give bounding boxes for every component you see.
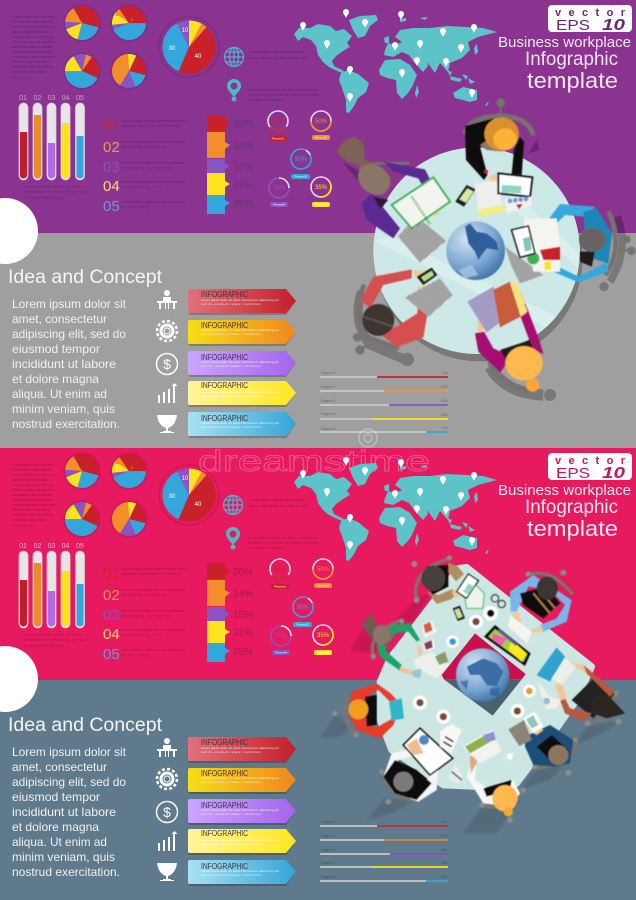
lower panel: big pie values: 40 [195, 502, 202, 508]
scene figures softened to match the source [332, 555, 625, 823]
lower panel: percentages: 20% [233, 567, 253, 578]
progress bar labels lower [321, 820, 448, 879]
text block: upper left intro: sed do eiusmod tempor inc [12, 24, 55, 29]
person: green top [362, 613, 423, 675]
lower panel: donut labels: 90% [297, 605, 310, 611]
lower panel: tube labels: 05 [76, 543, 84, 550]
progress bar labels upper: 70% [441, 371, 448, 375]
donut labels: Percent4 [273, 202, 285, 206]
lower panel: intro text: magna aliqua ut enim ad [12, 482, 53, 487]
lower panel: globe and pin captions: Lorem ipsum dolor sit amet consec [250, 497, 304, 502]
lower panel: list descriptions: adipiscing elit sed do eiusmod [121, 571, 181, 576]
lower panel: heading: Idea and Concept [8, 715, 163, 736]
donut labels: 35% [315, 185, 328, 191]
progress bar labels upper: 67% [441, 385, 448, 389]
tube labels: 03 [48, 95, 55, 102]
arrow banner text: INFOGRAPHIC [201, 321, 248, 330]
lower panel: numbered list: 04 [103, 626, 120, 643]
test tube bars [19, 103, 84, 180]
stacked bar percentages: 15% [233, 162, 253, 173]
lower panel: arrow banner text: Lorem ipsum dolor sit amet consectetur adipiscing elit [201, 869, 279, 873]
lower panel: arrow banner text [201, 738, 279, 877]
pie charts: four small pies [70, 11, 141, 83]
stacked bar percentages: 20% [233, 119, 253, 130]
tube labels [19, 95, 84, 102]
lower panel: pie rings [64, 452, 148, 538]
numbered list: 04 [103, 178, 120, 195]
text block: upper left intro: exercitation ullamco laboris [12, 44, 52, 49]
person left: purple top, brown hair [337, 137, 440, 245]
arrow banner text: Lorem ipsum dolor sit amet consectetur adipiscing elit [201, 390, 279, 394]
lower panel: arrow banner text: Lorem ipsum dolor sit amet consectetur adipiscing elit [201, 746, 279, 750]
tube labels: 02 [34, 95, 41, 102]
progress bar labels lower: 45% [441, 848, 448, 852]
person bottom-left: red jacket [361, 269, 430, 347]
lower panel: lorem text: eiusmod tempor [12, 790, 100, 804]
lower panel: percentages [233, 567, 253, 658]
progress bar labels lower: 70% [441, 820, 448, 824]
text block: lorem: minim veniam, quis [12, 402, 115, 416]
globe and pin captions [248, 49, 321, 102]
watermark: dreamstime [198, 445, 430, 478]
text block: upper left intro: voluptate velit esse cillum [12, 64, 54, 69]
lower panel: donut labels: Percent5 [317, 650, 329, 654]
progress bar labels lower: 58% [441, 861, 448, 865]
lower panel: tube caption [24, 632, 87, 648]
pie rings upper [64, 4, 148, 90]
lower panel: list descriptions: Lorem ipsum dolor sit amet consectetur [121, 566, 187, 571]
text block: lorem: nostrud exercitation. [12, 417, 120, 431]
arrow banner text: sed do eiusmod tempor incididunt [201, 364, 261, 368]
white corner circle upper [0, 198, 38, 264]
lower panel: intro text: nisi ut aliquip ex ea commodo [12, 497, 54, 502]
text block: upper left intro: pariatur [12, 75, 33, 80]
person: red-brown top with dark hair [555, 662, 625, 722]
lower panel: arrow banner text: sed do eiusmod tempor incididunt [201, 780, 261, 784]
numbered list descriptions: Lorem ipsum dolor sit amet consectetur [121, 118, 187, 123]
lower panel: arrow banner text: Lorem ipsum dolor sit amet consectetur adipiscing elit [201, 838, 279, 842]
numbered list descriptions: adipiscing elit sed do eiusmod [121, 123, 181, 128]
lower panel: numbered list [103, 565, 120, 663]
lower panel: intro text: consectetur adipiscing elit [12, 467, 53, 472]
long shadows [320, 593, 620, 833]
person: navy jacket [525, 723, 573, 767]
person: red shirt [348, 683, 400, 738]
donut labels: 50% [315, 119, 328, 125]
arrow banner text: Lorem ipsum dolor sit amet consectetur adipiscing elit [201, 360, 279, 364]
lower panel: donut labels: 50% [317, 567, 330, 573]
lower panel: arrow banner text: INFOGRAPHIC [201, 769, 248, 778]
lower panel: numbered list: 05 [103, 646, 120, 663]
lower panel: percentages: 25% [233, 647, 253, 658]
table and chair shadows [342, 140, 622, 401]
numbered list descriptions: adipiscing elit [121, 184, 162, 189]
badge: vector EPS 10: 10 [602, 17, 625, 34]
lower panel: arrow banner text: INFOGRAPHIC [201, 829, 248, 838]
lower panel: list descriptions: adipiscing [121, 652, 149, 657]
lower panel: tube labels: 04 [62, 543, 69, 550]
globe and pin captions: Lorem ipsum dolor sit amet consec [250, 49, 304, 54]
lower panel: globe and pin captions: Lorem ipsum dolor sit amet consectetur [248, 535, 319, 540]
lower panel: lorem text: nostrud exercitation. [12, 865, 120, 879]
person: blue shirt [510, 575, 572, 633]
arrow banner text: Lorem ipsum dolor sit amet consectetur adipiscing elit [201, 298, 279, 302]
lower panel: lorem text: et dolore magna [12, 820, 99, 834]
arrow banner text: sed do eiusmod tempor incididunt [201, 425, 261, 429]
lower panel: list descriptions: Lorem ipsum dolor sit amet consectetur [121, 608, 187, 613]
lower panel: title: template [527, 516, 618, 541]
lower panel: numbered list: 03 [103, 607, 120, 624]
lower panel: big pie values [169, 476, 202, 508]
lower panel: intro text: sed do eiusmod tempor inc [12, 472, 55, 477]
lower panel: numbered list: 01 [103, 565, 120, 582]
icons column [156, 290, 178, 433]
documents on table [392, 173, 560, 333]
lower panel: pies [70, 459, 141, 531]
chair casters [332, 555, 621, 823]
tube labels: 05 [76, 95, 84, 102]
progress bar labels upper: Degree 3 [321, 399, 335, 403]
numbered list descriptions: Lorem ipsum dolor sit amet consectetur [121, 139, 187, 144]
big pie chart [159, 17, 219, 77]
lower panel: list descriptions: adipiscing elit [121, 632, 162, 637]
lower panel: big pie [159, 465, 219, 525]
lower panel: big pie values: 10 [182, 476, 189, 482]
text block: upper left intro: consectetur adipiscing elit [12, 19, 53, 24]
chairs [359, 104, 632, 390]
lower panel: arrow banner text: INFOGRAPHIC [201, 862, 248, 871]
text block: lorem [12, 297, 127, 431]
background: slate band [0, 680, 636, 900]
lower panel: lorem text: amet, consectetur [12, 760, 107, 774]
stacked bar percentages: 25% [233, 199, 253, 210]
numbered list descriptions: Lorem ipsum dolor sit amet consectetur [121, 179, 187, 184]
lower panel: intro text: consequat duis aute irure [12, 502, 56, 507]
lower panel: list descriptions: Lorem ipsum dolor sit amet consectetur [121, 587, 187, 592]
donut labels: 90% [295, 157, 308, 163]
lower panel: badge: 10 [602, 465, 625, 482]
lower panel: arrow banners [188, 737, 296, 886]
globe [456, 648, 509, 702]
stacked bar percentages [233, 119, 253, 210]
lower panel: donut labels: 20% [274, 567, 287, 573]
badge: vector EPS 10 [548, 5, 632, 34]
stacked bar percentages: 14% [233, 141, 253, 152]
lower panel: dollar sign: $ [163, 804, 171, 820]
progress bar labels lower: Degree 4 [321, 861, 335, 865]
lower panel: arrow banner text: sed do eiusmod tempor incididunt [201, 750, 261, 754]
tube caption: consectetur adipiscing elit sed [24, 189, 87, 194]
lower panel: badge: EPS [556, 465, 590, 482]
lower panel: globe and pin captions: incididunt ut labore [248, 545, 285, 550]
lower panel: tube labels: 01 [19, 543, 27, 550]
globe and pin captions: incididunt ut labore [248, 97, 285, 102]
globe and pin captions: Lorem ipsum dolor sit amet consectetur [248, 87, 319, 92]
lower panel: lorem text: aliqua. Ut enim ad [12, 835, 107, 849]
lower panel: pin icon [226, 527, 240, 550]
lower panel: intro text: voluptate velit esse cillum [12, 512, 54, 517]
lower panel: arrow banner text: Lorem ipsum dolor sit amet consectetur adipiscing elit [201, 776, 279, 780]
person: white shirt with gray hair [383, 748, 438, 802]
lower panel: intro text: minim veniam quis nostrud [12, 487, 54, 492]
lower panel: donut labels [274, 567, 330, 654]
text block: lorem: eiusmod tempor [12, 342, 100, 356]
numbered list: 01 [103, 117, 120, 134]
lower panel: tube labels [19, 543, 84, 550]
lower panel: intro text: dolor in reprehenderit in [12, 507, 50, 512]
donut labels: Percent5 [315, 202, 327, 206]
lower panel: donut labels: Percent2 [317, 584, 329, 588]
big pie values: 30 [169, 46, 176, 52]
lower panel: arrow banner text: Lorem ipsum dolor sit amet consectetur adipiscing elit [201, 808, 279, 812]
text block: upper left intro [12, 14, 56, 80]
numbered list descriptions: adipiscing [121, 204, 149, 209]
numbered list descriptions [121, 118, 187, 209]
text block: upper left intro: nisi ut aliquip ex ea commodo [12, 49, 54, 54]
title: Business workplace [498, 34, 631, 51]
progress bar labels lower: Degree 1 [321, 820, 335, 824]
text block: upper left intro: magna aliqua ut enim ad [12, 34, 53, 39]
lower panel: globe and pin captions: tetur adipiscing elit sed do eius [250, 503, 308, 508]
arrow banner text: Lorem ipsum dolor sit amet consectetur adipiscing elit [201, 328, 279, 332]
arrow banner text: sed do eiusmod tempor incididunt [201, 394, 261, 398]
globe and pin captions: adipiscing elit sed do eiusmod tempor [248, 92, 321, 97]
donut labels: 20% [272, 119, 285, 125]
progress bars upper [320, 377, 448, 432]
globe [446, 221, 505, 280]
lower panel: globe icon [224, 496, 242, 514]
big pie values [169, 28, 202, 60]
lower panel: intro text: exercitation ullamco laboris [12, 492, 52, 497]
watermark [198, 429, 430, 478]
big pie values: 40 [195, 54, 202, 60]
lower panel: intro text: Lorem ipsum dolor sit amet [12, 462, 55, 467]
badge: vector EPS 10: EPS [556, 17, 590, 34]
numbered list: 03 [103, 159, 120, 176]
progress bar labels lower: Degree 5 [321, 875, 335, 879]
progress bar labels upper: Degree 5 [321, 427, 335, 431]
stacked bar percentages: 31% [233, 180, 253, 191]
scene figures softened to match the source [337, 98, 636, 392]
arrow banner text: sed do eiusmod tempor incididunt [201, 332, 261, 336]
lower panel: intro text: ididunt ut labore et dolore [12, 477, 51, 482]
lower panel: percentages: 15% [233, 610, 253, 621]
arrow banner text: INFOGRAPHIC [201, 290, 248, 299]
lower panel: list descriptions: Lorem ipsum dolor sit amet consectetur [121, 627, 187, 632]
lower panel: donut labels: 35% [317, 633, 330, 639]
lower panel: stacked bars [207, 563, 230, 662]
arrow banners [188, 289, 296, 438]
white corner circle lower [0, 646, 38, 712]
lower panel: arrow banner text: sed do eiusmod tempor incididunt [201, 873, 261, 877]
background: purple band [0, 0, 636, 233]
text block: upper left intro: minim veniam quis nostrud [12, 39, 54, 44]
tube labels: 01 [19, 95, 27, 102]
lower panel: big pie values: 30 [169, 494, 176, 500]
lower panel: globe and pin captions: adipiscing elit sed do eiusmod tempor [248, 540, 321, 545]
text block: lorem: incididunt ut labore [12, 357, 116, 371]
background: gray band [0, 233, 636, 448]
donut labels [272, 119, 328, 206]
lower panel: arrow banner text: sed do eiusmod tempor incididunt [201, 812, 261, 816]
progress bar labels upper: Degree 2 [321, 385, 335, 389]
lower panel: arrow banner text: INFOGRAPHIC [201, 738, 248, 747]
chairs [345, 558, 617, 807]
lower panel: percentages: 14% [233, 589, 253, 600]
chair casters [353, 98, 636, 355]
arrow banner text: Lorem ipsum dolor sit amet consectetur adipiscing elit [201, 421, 279, 425]
person top: black suit, orange hair [465, 117, 524, 186]
text block: lorem: adipiscing elit, sed do [12, 327, 126, 341]
world map [294, 9, 497, 113]
text block: upper left intro: dolor in reprehenderit in [12, 59, 50, 64]
lower panel: intro text: pariatur [12, 523, 33, 528]
lower panel: title: Infographic [525, 497, 618, 518]
diamond table [380, 567, 592, 787]
lower panel: donut labels: Percent3 [296, 622, 309, 626]
numbered list descriptions: Lorem ipsum dolor sit amet consectetur [121, 160, 187, 165]
lower panel: globe and pin captions [248, 497, 321, 550]
numbered list descriptions: adipiscing elit sed do [121, 144, 167, 149]
text block: upper left intro: Lorem ipsum dolor sit amet [12, 14, 55, 19]
lower panel: arrow banner text: sed do eiusmod tempor incididunt [201, 842, 261, 846]
lower panel: lorem text [12, 745, 127, 879]
lower panel: arrow banner text: INFOGRAPHIC [201, 801, 248, 810]
person right: blue shirt [538, 204, 612, 282]
title: Infographic [525, 49, 618, 70]
lower panel: list descriptions [121, 566, 187, 657]
lower panel: list descriptions: adipiscing elit sed do [121, 592, 167, 597]
table items [389, 574, 576, 783]
background: pink band [0, 448, 636, 680]
lower panel: donut labels: Percent1 [274, 584, 286, 588]
lower panel: donut gauges [266, 555, 337, 655]
text block: lorem: aliqua. Ut enim ad [12, 387, 107, 401]
lower panel: badge: vector [555, 455, 626, 467]
icon: location pin [227, 79, 241, 102]
lower panel: numbered list: 02 [103, 587, 120, 604]
tube caption [24, 184, 87, 200]
icon: globe [224, 48, 244, 66]
badge: vector EPS 10: vector [555, 7, 626, 19]
lower panel: title [498, 482, 631, 541]
numbered list: 02 [103, 139, 120, 156]
lower panel: tube labels: 03 [48, 543, 55, 550]
tube labels: 04 [62, 95, 69, 102]
lower panel: intro text: dolore eu fugiat nulla [12, 517, 47, 522]
donut labels: Percent1 [272, 136, 284, 140]
lower panel: donut labels: Percent4 [275, 650, 287, 654]
progress bar labels upper: 17% [441, 426, 448, 430]
progress bar labels lower: 67% [441, 834, 448, 838]
lower panel: percentages: 31% [233, 628, 253, 639]
text block: upper left intro: ididunt ut labore et dolore [12, 29, 51, 34]
donut labels: 75% [273, 186, 286, 192]
arrow banner text: INFOGRAPHIC [201, 381, 248, 390]
round table [373, 147, 583, 354]
progress bar labels lower: Degree 2 [321, 834, 335, 838]
text block: upper left intro: consequat duis aute irure [12, 54, 56, 59]
lower panel: tube labels: 02 [34, 543, 41, 550]
lower panel: icons [156, 738, 178, 881]
lower panel: title: Business workplace [498, 482, 631, 499]
text block: lorem: amet, consectetur [12, 312, 107, 326]
lower panel: list descriptions: Lorem ipsum dolor sit amet consectetur [121, 647, 187, 652]
lower panel: intro text [12, 462, 56, 528]
progress bar labels upper: 45% [441, 399, 448, 403]
numbered list descriptions: adipiscing elit sed do [121, 165, 172, 170]
tube caption: Lorem ipsum dolor sit amet [24, 184, 83, 189]
arrow banner text: INFOGRAPHIC [201, 414, 248, 423]
text block: upper left intro: dolore eu fugiat nulla [12, 69, 47, 74]
lower panel: list descriptions: adipiscing elit sed do [121, 613, 172, 618]
lower panel: tube caption: consectetur adipiscing elit sed [24, 637, 87, 642]
lower panel: tube caption: do eiusmod tempor [24, 643, 65, 648]
text block: lorem: Lorem ipsum dolor sit [12, 297, 127, 311]
lower panel: lorem text: adipiscing elit, sed do [12, 775, 126, 789]
arrow banner text: INFOGRAPHIC [201, 353, 248, 362]
progress bar labels upper: 58% [441, 413, 448, 417]
progress bar labels upper: Degree 1 [321, 371, 335, 375]
lower panel: badge [548, 453, 632, 482]
lower panel: lorem text: incididunt ut labore [12, 805, 116, 819]
lower panel: tube caption: Lorem ipsum dolor sit amet [24, 632, 83, 637]
dollar sign: $ [163, 356, 171, 372]
lower panel: world map [294, 457, 497, 561]
lower panel: lorem text: minim veniam, quis [12, 850, 115, 864]
donut labels: Percent2 [315, 136, 327, 140]
progress bar labels upper: Degree 4 [321, 412, 335, 416]
numbered list [103, 117, 120, 215]
lower panel: test tubes [19, 551, 84, 628]
person bottom: magenta top, blonde hair [475, 290, 543, 392]
progress bar labels lower: Degree 3 [321, 848, 335, 852]
progress bar labels lower: 17% [441, 875, 448, 879]
meeting table scene upper [337, 98, 636, 401]
arrow banner text [201, 290, 279, 429]
meeting table scene lower [320, 555, 625, 833]
arrow banner text: sed do eiusmod tempor incididunt [201, 302, 261, 306]
text block: lorem: et dolore magna [12, 372, 99, 386]
progress bar labels upper [321, 371, 448, 431]
stacked bars with pointers [207, 115, 230, 214]
donut gauges [264, 107, 335, 207]
numbered list descriptions: Lorem ipsum dolor sit amet consectetur [121, 199, 187, 204]
person: tan jacket [421, 563, 464, 604]
globe and pin captions: tetur adipiscing elit sed do eius [250, 55, 308, 60]
person: white shirt blonde [467, 753, 520, 816]
tube caption: do eiusmod tempor [24, 195, 65, 200]
lower panel: lorem text: Lorem ipsum dolor sit [12, 745, 127, 759]
title [498, 34, 631, 93]
donut labels: Percent3 [294, 174, 307, 178]
big pie values: 10 [182, 28, 189, 34]
lower panel: donut labels: 75% [275, 634, 288, 640]
heading: Idea and Concept: Idea and Concept [8, 267, 163, 288]
numbered list: 05 [103, 198, 120, 215]
progress bars lower [320, 826, 448, 881]
title: template [527, 68, 618, 93]
